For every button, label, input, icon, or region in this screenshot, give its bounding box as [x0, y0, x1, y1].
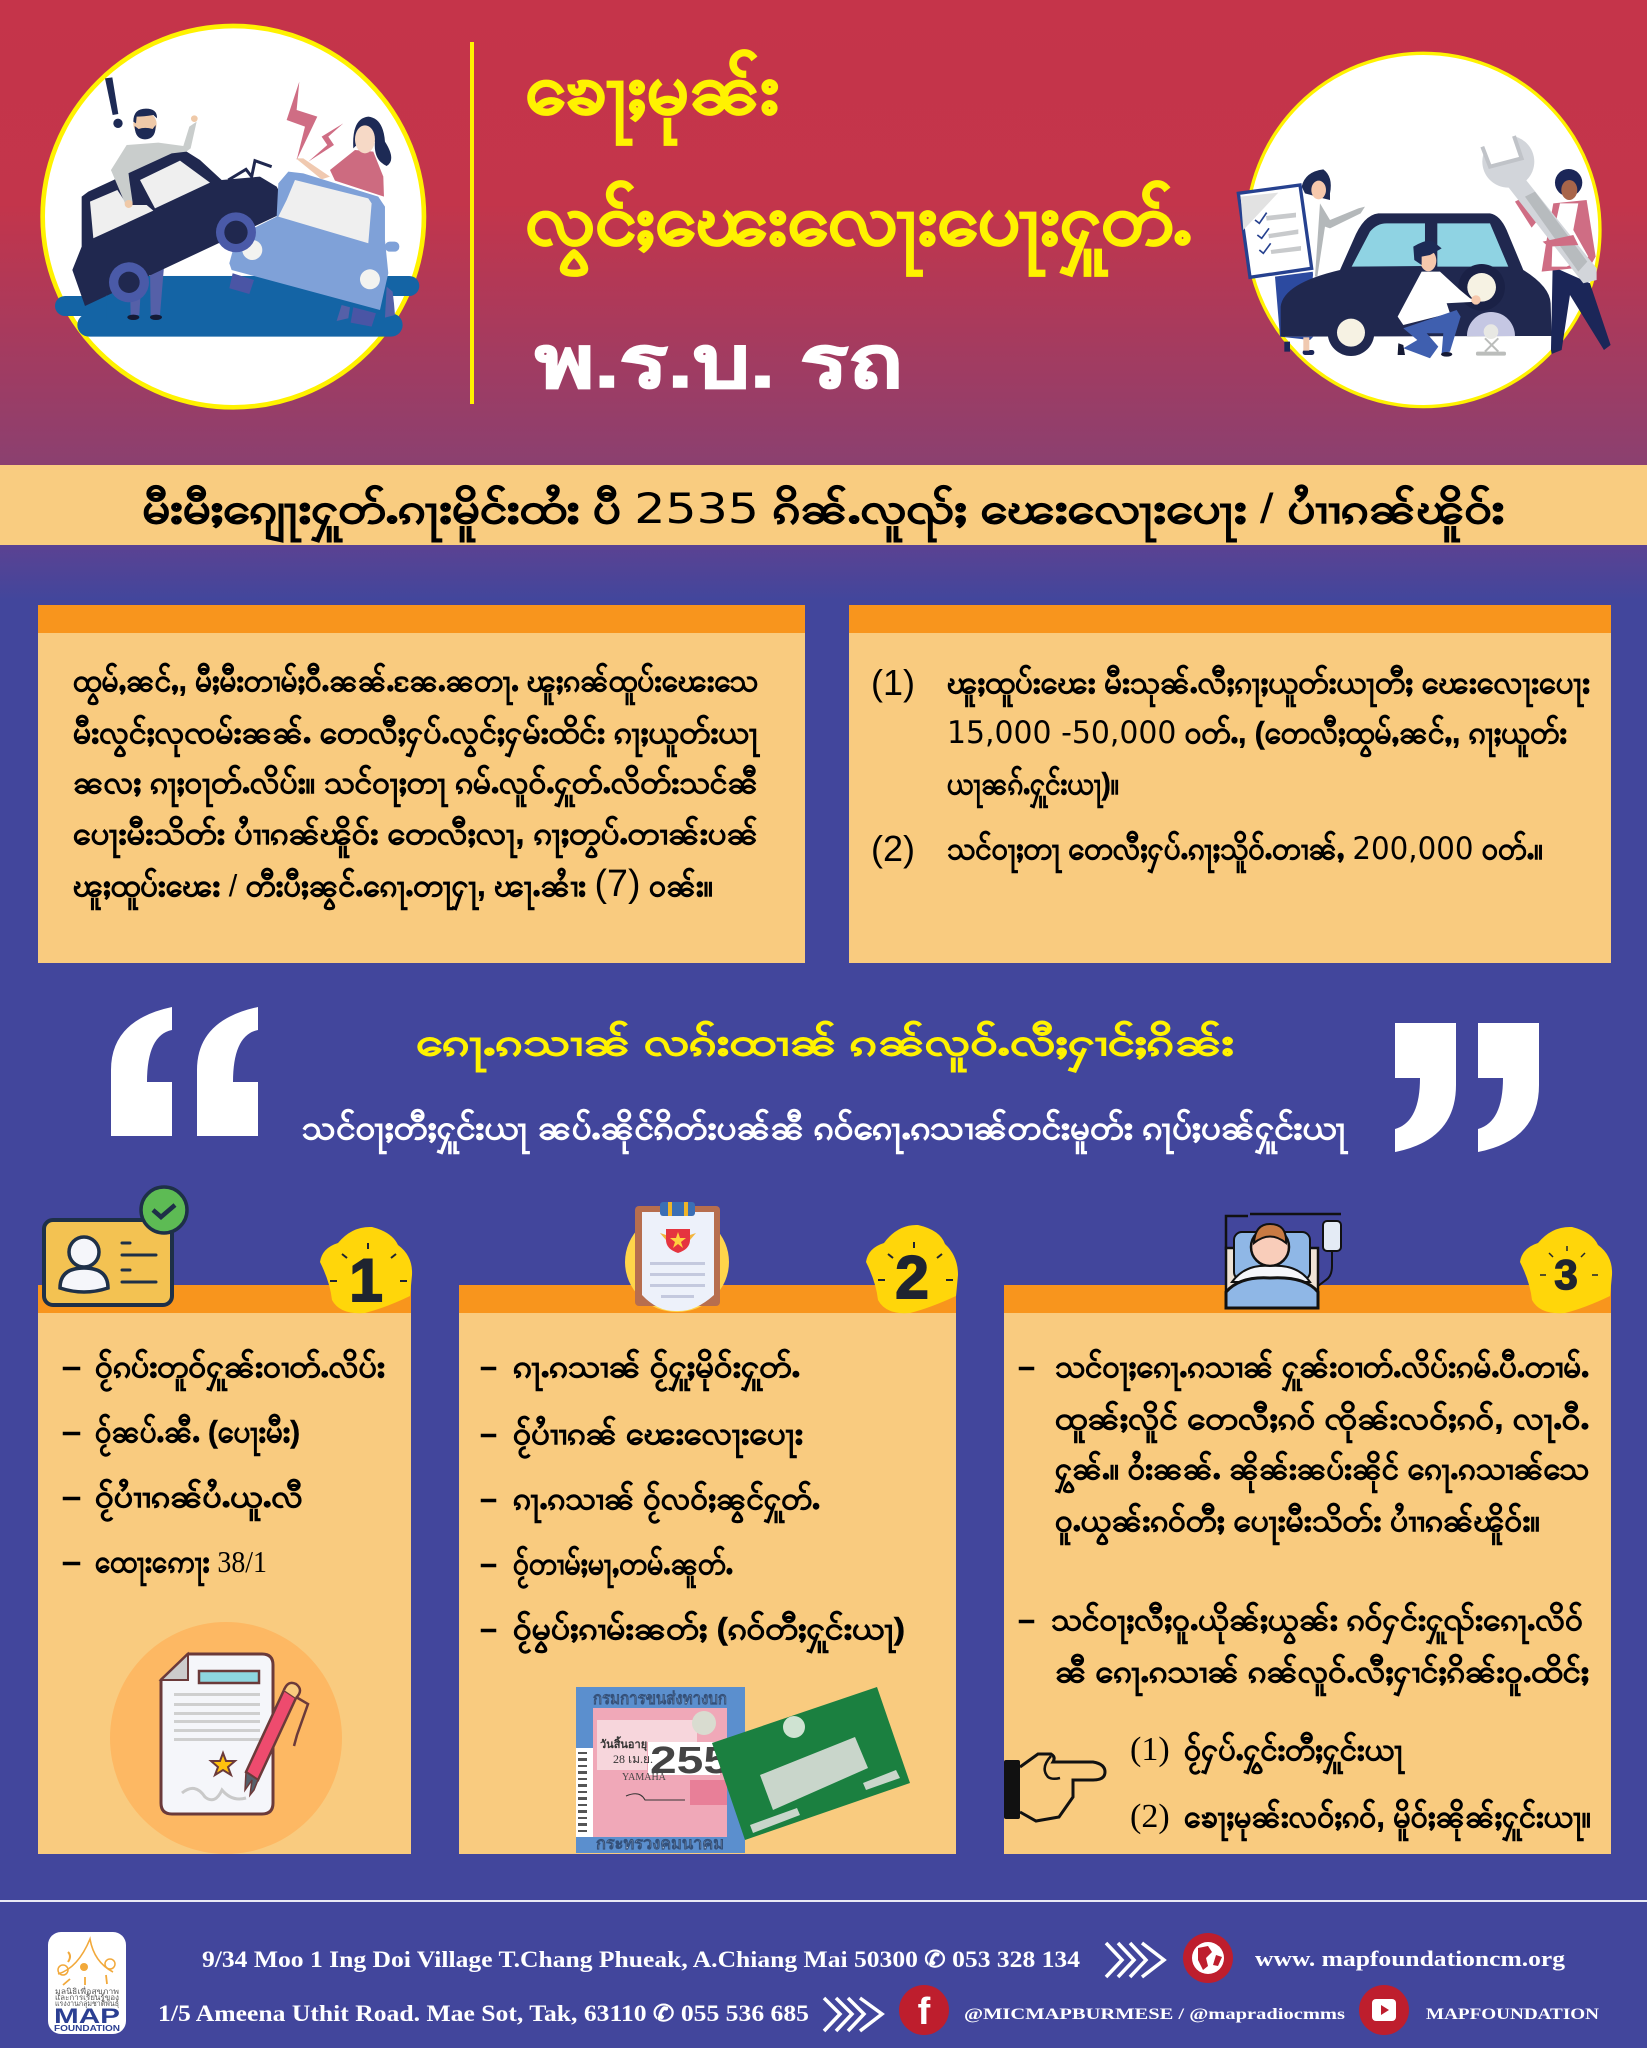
logo: MAP foundation: FOUNDATION — [54, 2024, 120, 2033]
icon: arrows to social — [824, 1998, 882, 2031]
title: พ.ร.บ. รถ — [535, 323, 903, 403]
list: card 3 text: ၶေႃႈမုၼ်းလဝ်ႈၵဝ်, မိူဝ်ႈၼိုၼ်ႈႁူင်းယႃ။ — [1184, 1799, 1591, 1842]
heading: documents quote: ၵေႃႉၵသၢၼ် လၵ်းထၢၼ် ၵၼ်လူဝ်ႉလီႈႁၢင်ႈၵိၼ်း — [416, 1020, 1234, 1073]
panel: card 1 — [38, 1187, 412, 1854]
title — [525, 49, 1192, 403]
panel: law text: မီးလွင်ႈလုၸမ်းၼၼ်ႉ တေလီႈႁပ်ႉလွင်ႈႁမ်းထိင်း ၵႃႈယူတ်းယႃ — [73, 715, 762, 758]
badge: number 1 — [320, 1227, 412, 1314]
panel: compensation amounts: သင်ဝႃႈတႃ တေလီႈႁပ်ႉၵႃႈသိူဝ်ႉတၢၼ်ႇ 200,000 ဝတ်ႉ။ — [947, 831, 1543, 874]
list: card 3 text: သင်ဝႃႈၵေႃႉၵသၢၼ် ႁူၼ်းဝၢတ်ႉလိပ်းၵမ်ႉပီႉတၢမ်ႉ — [1055, 1349, 1589, 1392]
icon: youtube — [1359, 1985, 1409, 2035]
panel: card 2 — [459, 1202, 958, 1854]
list: card 3 text: ဝႂ်ႁပ်ႉႁွင်းတီႈႁူင်းယႃ — [1184, 1732, 1406, 1775]
image: tax sticker and registration book: กรมการขนส่งทางบก — [593, 1689, 727, 1708]
list: card 1 items: ဝႂ်ၼပ်ႉၼီႉ (ပေႃးမီး) — [95, 1414, 300, 1457]
icon: signed document — [110, 1622, 342, 1854]
footer: address Chiang Mai: 9/34 Moo 1 Ing Doi Village T.Chang Phueak, A.Chiang Mai 50300 ✆ 053 328 134 — [202, 1947, 1081, 1972]
banner strip — [0, 465, 1647, 545]
illustration: car repair in circle — [1238, 53, 1611, 407]
panel: law text: ထွမ်ႇၼင်ႇ, မီႈမီးတၢမ်ႈဝီႉၼၼ်ႉၼႄႉၼတႃႉ ၽူႈၵၼ်ထူပ်းၽေးသေ — [73, 663, 758, 706]
title: ၶေႃႈမုၼ်း — [525, 49, 779, 146]
list: card 3 text: ဝူႉယွၼ်းၵဝ်တီႈ ပေႃးမီးသိတ်း ပၢႆၢၵၼ်ၽိူဝ်း။ — [1055, 1502, 1540, 1546]
list: card 1 items: ဝႂ်ပၢႆၢၵၼ်ပႆႉယူႉလီ — [95, 1478, 303, 1522]
heading: documents quote — [302, 1020, 1349, 1155]
panel: compensation amounts: ယႃၼၵ်ႉႁူင်းယႃ)။ — [947, 766, 1119, 809]
badge: number 2: 2 — [895, 1244, 929, 1311]
image: tax sticker and registration book: YAMAHA — [622, 1772, 667, 1783]
list: card 3 text — [1019, 1349, 1591, 1842]
badge: number 3 — [1520, 1227, 1612, 1313]
list: card 3 text: (2) — [1130, 1798, 1170, 1835]
title: လွင်ႈၽေးလေႃးပေႃးႁူတ်ႉ — [525, 180, 1192, 278]
icon: arrows to website — [1106, 1943, 1164, 1977]
footer: address Mae Sot: 1/5 Ameena Uthit Road. Mae Sot, Tak, 63110 ✆ 055 536 685 — [158, 2001, 809, 2026]
icon: globe — [1183, 1933, 1233, 1983]
panel: law text: ၽူႈထူပ်းၽေး / တီးပီႈၼွင်ႉၵေႃႉတႃႁႃ, ၽႃႉၼၢႆး (7) ဝၼ်း။ — [73, 863, 713, 911]
list: card 2 items — [481, 1349, 905, 1654]
icon: clipboard — [625, 1202, 729, 1312]
panel: card 3 — [1004, 1214, 1612, 1854]
list: card 2 items: ဝႂ်မွပ်ႈၵၢမ်းၼတ်ႈ (ၵဝ်တီႈႁူင်းယႃ) — [513, 1611, 905, 1654]
footer: youtube channel: MAPFOUNDATION — [1426, 2006, 1600, 2023]
panel: compensation amounts: (1) — [871, 662, 915, 703]
panel: law text: ပေႃးမီးသိတ်း ပၢႆၢၵၼ်ၽိူဝ်း တေလီႈလႃ, ၵႃႈတွပ်ႉတၢၼ်းပၼ် — [73, 815, 758, 859]
badge: number 1: 1 — [349, 1247, 383, 1314]
badge: number 3: 3 — [1554, 1251, 1578, 1298]
image: tax sticker and registration book — [576, 1687, 910, 1853]
list: card 3 text: သင်ဝႃႈလီႈဝူႉယိုၼ်ႈယွၼ်း ၵဝ်ႁင်းႁူၺ်းၵေႃႉလိဝ် — [1051, 1602, 1583, 1645]
list: card 1 items: ထေႃးဢေႃး 38/1 — [95, 1544, 267, 1587]
icon: patient in bed — [1226, 1214, 1341, 1308]
icon: id card with check — [44, 1187, 187, 1305]
banner strip: မီးမီႈၵျေႃးႁူတ်ႉၵႃးမိူင်းထႆး ပီ 2535 ၵိၼ်ႉလူၺ်ႈ ၽေးလေႃးပေႃး / ပၢႆၢၵၼ်ၽိူဝ်း — [142, 484, 1504, 543]
list: card 1 items: ဝႂ်ၵပ်းတူဝ်ႁူၼ်းဝၢတ်ႉလိပ်း — [95, 1349, 385, 1392]
icon: opening quote mark — [111, 1007, 258, 1136]
heading: documents quote: သင်ဝႃႈတီႈႁူင်းယႃ ၼပ်ႉၼိုင်ၵိတ်းပၼ်ၼီ ၵဝ်ၵေႃႉၵသၢၼ်တင်းမူတ်း ၵႃပ်ႈပၼ်ႁူင်းယႃ — [302, 1108, 1349, 1155]
image: tax sticker and registration book: 255 — [650, 1740, 730, 1782]
logo: MAP foundation: และการเรียนรู้ของ — [55, 1993, 119, 2002]
list: card 3 text: ထူၼ်ႈလိူင် တေလီႈၵဝ် ၸိုၼ်းလဝ်ႈၵဝ်, လႃႉဝီႉ — [1055, 1401, 1589, 1444]
footer divider — [0, 1900, 1647, 1902]
icon: pointing hand — [1004, 1754, 1105, 1821]
illustration: car crash in circle — [43, 26, 424, 407]
logo: MAP foundation — [48, 1932, 126, 2034]
badge: number 2 — [866, 1225, 958, 1313]
logo: MAP foundation: แรงงานกลุ่มชาติพันธุ์ — [55, 1999, 119, 2008]
list: card 2 items: ဝႂ်တၢမ်ႈမႃႇတမ်ႉၼူတ်ႉ — [513, 1546, 733, 1589]
image: tax sticker and registration book: 28 เม.ย. — [613, 1752, 653, 1766]
list: card 3 text: (1) — [1130, 1731, 1170, 1768]
icon: facebook: f — [918, 1991, 931, 2033]
panel: compensation amounts: (2) — [871, 828, 915, 869]
footer: social handles: @MICMAPBURMESE / @mapradiocmms — [964, 2006, 1345, 2023]
panel: law text — [38, 605, 805, 963]
panel: law text: ၼလႈ ၵႃႈဝႃတ်ႉလိပ်း။ သင်ဝႃႈတႃ ၵမ်ႉလူဝ်ႉႁူတ်ႉလိတ်းသင်ၼီ — [73, 765, 758, 808]
list: card 1 items — [63, 1349, 385, 1587]
panel: compensation amounts: ၽူႈထူပ်းၽေး မီးသုၼ်ႉလီႈၵႃႈယူတ်းယႃတီႈ ၽေးလေႃးပေႃး — [947, 665, 1590, 708]
logo: MAP foundation: MAP — [54, 2005, 120, 2028]
panel: compensation amounts — [849, 605, 1611, 963]
footer: website: www. mapfoundationcm.org — [1255, 1946, 1565, 1971]
icon: closing quote mark — [1395, 1023, 1539, 1152]
list: card 3 text: ႁွၼ်ႉ။ ဝႆးၼၼ်ႉ ၼိုၼ်းၼပ်းၼိုင် ၵေႃႉၵသၢၼ်သေ — [1055, 1450, 1589, 1494]
panel: compensation amounts: 15,000 -50,000 ဝတ်ႉ, (တေလီႈထွမ်ႇၼင်ႇ, ၵႃႈယူတ်း — [947, 715, 1567, 758]
list: card 2 items: ဝႂ်ပၢႆၢၵၼ် ၽေးလေႃးပေႃး — [513, 1415, 803, 1459]
image: tax sticker and registration book: กระทรวงคมนาคม — [596, 1834, 724, 1853]
logo: MAP foundation: มูลนิธิเพื่อสุขภาพ — [55, 1986, 119, 1996]
list: card 2 items: ၵႃႉၵသၢၼ် ဝႂ်ႁူႈမိုဝ်းႁူတ်ႉ — [513, 1349, 800, 1392]
list: card 3 text: ၼီ ၵေႃႉၵသၢၼ် ၵၼ်လူဝ်ႉလီႈႁၢင်ႈၵိၼ်းဝူႉထိင်ႈ — [1055, 1654, 1589, 1697]
image: tax sticker and registration book: วันสิ้นอายุ — [600, 1736, 647, 1752]
icon: facebook — [899, 1985, 949, 2035]
list: card 2 items: ၵႃႉၵသၢၼ် ဝႂ်လဝ်ႈၼွင်ႁူတ်ႉ — [513, 1481, 820, 1524]
divider line — [470, 42, 474, 404]
